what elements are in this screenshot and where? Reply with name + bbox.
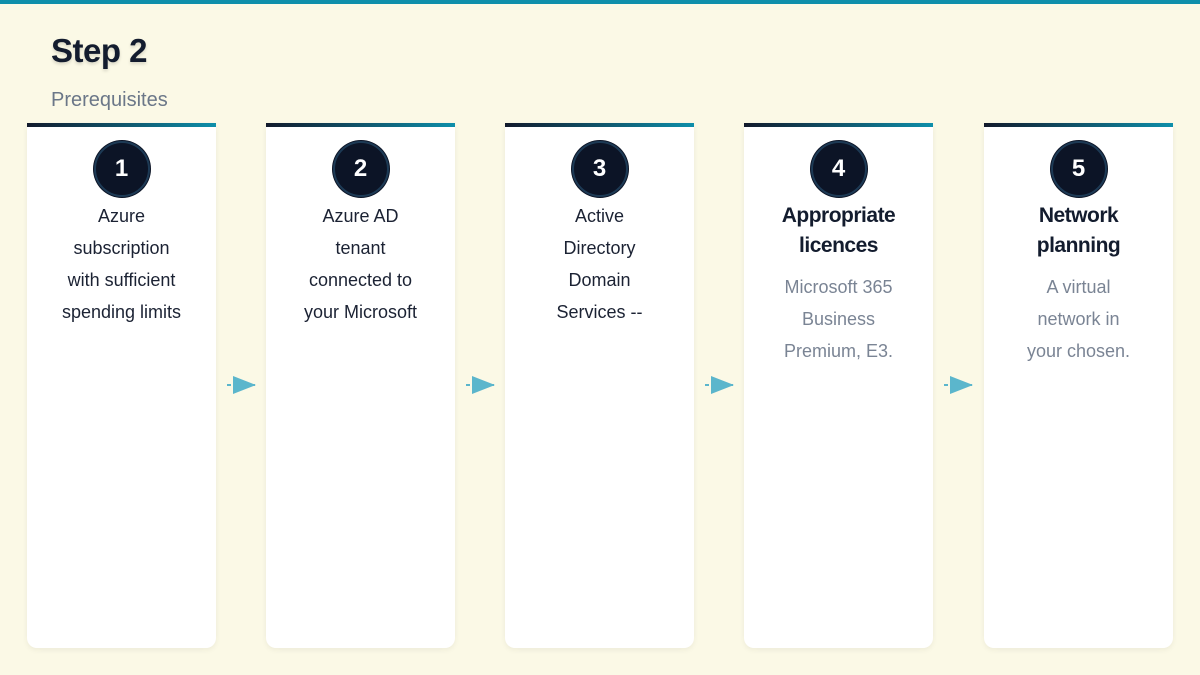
description 5: your chosen. [1027, 341, 1130, 361]
description 4: Microsoft 365 [784, 277, 893, 297]
panel: step 3 [505, 123, 694, 648]
arrow 1 [227, 376, 256, 394]
text 3: Active [575, 206, 624, 226]
badge 4 [810, 141, 866, 197]
text 3 [556, 206, 642, 322]
text 1: Azure [98, 206, 145, 226]
heading 4: licences [799, 234, 878, 257]
heading 5: Network [1039, 204, 1118, 227]
badge 3 [572, 141, 628, 197]
text 2: connected to [309, 270, 412, 290]
arrow 2 [466, 376, 495, 394]
panel: step 4 [744, 123, 933, 648]
heading 4 [782, 204, 895, 257]
text 3: Domain [568, 270, 631, 290]
title: Step 2 [51, 32, 147, 69]
panel: step 1 [27, 123, 216, 648]
text 2 [304, 206, 417, 322]
heading 5: planning [1037, 234, 1120, 257]
badge 3: 3 [593, 155, 606, 182]
text 2: tenant [335, 238, 386, 258]
heading 5 [1037, 204, 1120, 257]
text 1 [62, 206, 181, 322]
text 2: your Microsoft [304, 302, 417, 322]
badge 1 [94, 141, 150, 197]
text 2: Azure AD [322, 206, 399, 226]
badge 5: 5 [1072, 155, 1085, 182]
description 4 [784, 277, 893, 361]
arrow 4 [944, 376, 973, 394]
description 4: Premium, E3. [784, 341, 893, 361]
arrow 3 [705, 376, 734, 394]
badge 5 [1050, 141, 1106, 197]
text 3: Directory [563, 238, 636, 258]
description 5 [1027, 277, 1130, 361]
text 3: Services -- [556, 302, 642, 322]
text 1: spending limits [62, 302, 181, 322]
text 1: with sufficient [68, 270, 175, 290]
badge 1: 1 [115, 155, 128, 182]
panel: step 2 [266, 123, 455, 648]
description 5: A virtual [1046, 277, 1111, 297]
badge 2 [332, 141, 388, 197]
text 1: subscription [73, 238, 170, 258]
description 5: network in [1037, 309, 1120, 329]
panel: step 5 [984, 123, 1173, 648]
badge 2: 2 [354, 155, 367, 182]
heading 4: Appropriate [782, 204, 895, 227]
badge 4: 4 [832, 155, 845, 182]
description 4: Business [802, 309, 875, 329]
subtitle: Prerequisites [51, 89, 168, 111]
